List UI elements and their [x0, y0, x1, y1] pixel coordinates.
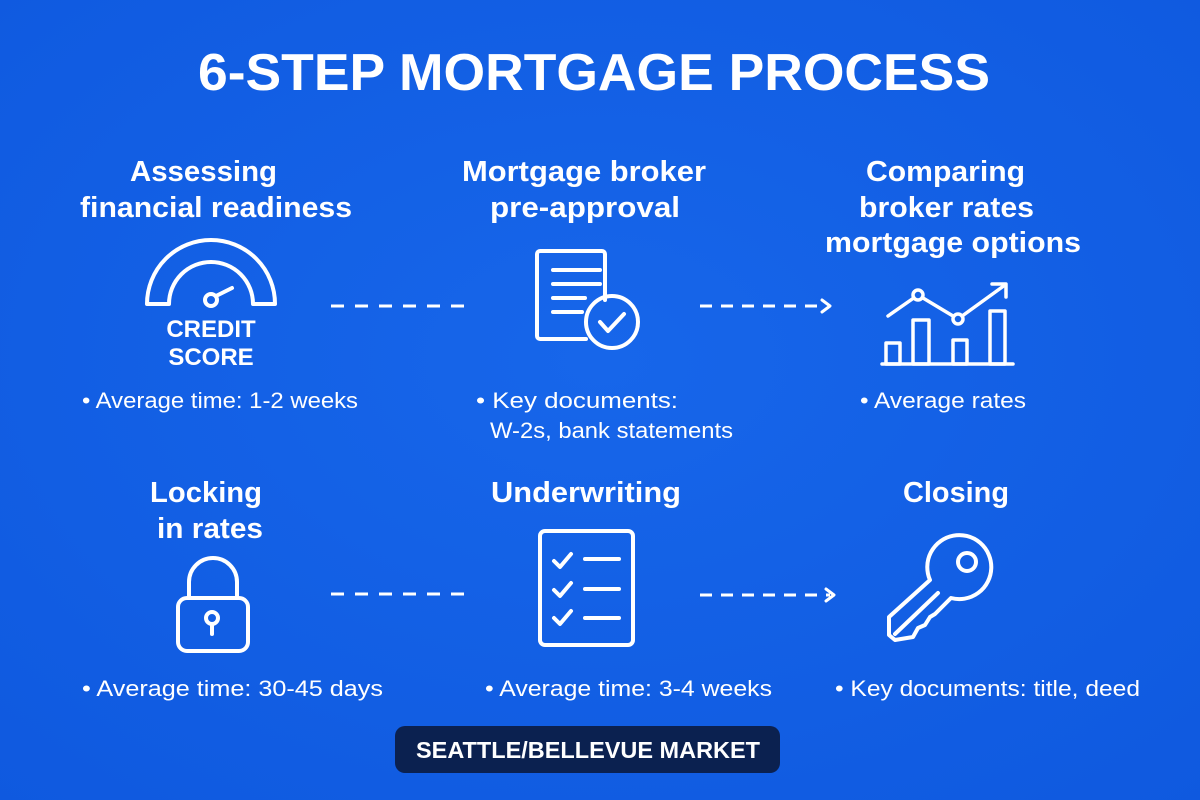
bullet: step 2: • Key documents: [476, 388, 678, 413]
heading: step 2: pre-approval [490, 192, 680, 224]
icon: key [889, 535, 991, 640]
icon: rate chart [882, 284, 1013, 364]
icon label: credit score: SCORE [168, 344, 254, 371]
heading: step 1: Assessing [130, 156, 277, 188]
bullet: step 1: • Average time: 1-2 weeks [82, 388, 358, 413]
step 6: closing [835, 477, 1140, 701]
bullet: step 2: W-2s, bank statements [490, 418, 733, 443]
heading: step 5: Underwriting [491, 477, 681, 509]
heading: step 3: Comparing [866, 156, 1025, 188]
heading: step 6: Closing [903, 477, 1009, 509]
bullet: step 3: • Average rates [860, 388, 1026, 413]
heading: step 3: broker rates [859, 192, 1034, 224]
icon: padlock [178, 558, 248, 651]
icon: checklist [540, 531, 633, 645]
bullet: step 4: • Average time: 30-45 days [82, 676, 383, 701]
heading: step 2: Mortgage broker [462, 156, 706, 188]
step 1: financial readiness [80, 156, 358, 413]
step 4: locking rates [82, 477, 383, 701]
bullet: step 5: • Average time: 3-4 weeks [485, 676, 772, 701]
arrow: step 5 to 6 [700, 589, 834, 601]
arrow: step 2 to 3 [700, 300, 830, 312]
step 3: comparing rates [825, 156, 1081, 413]
icon: document with check [537, 251, 638, 348]
icon: credit score gauge [147, 240, 275, 306]
connector: step 4 to 5 [331, 592, 465, 596]
title: 6-STEP MORTGAGE PROCESS [198, 44, 990, 102]
step 2: pre-approval [462, 156, 733, 443]
heading: step 4: in rates [157, 513, 263, 545]
icon label: credit score: CREDIT [166, 316, 256, 343]
heading: step 3: mortgage options [825, 227, 1081, 259]
footer badge: market [395, 726, 780, 773]
heading: step 1: financial readiness [80, 192, 352, 224]
footer badge: market: SEATTLE/BELLEVUE MARKET [416, 737, 760, 763]
bullet: step 6: • Key documents: title, deed [835, 676, 1140, 701]
step 5: underwriting [485, 477, 772, 701]
heading: step 4: Locking [150, 477, 262, 509]
connector: step 1 to 2 [331, 304, 465, 308]
